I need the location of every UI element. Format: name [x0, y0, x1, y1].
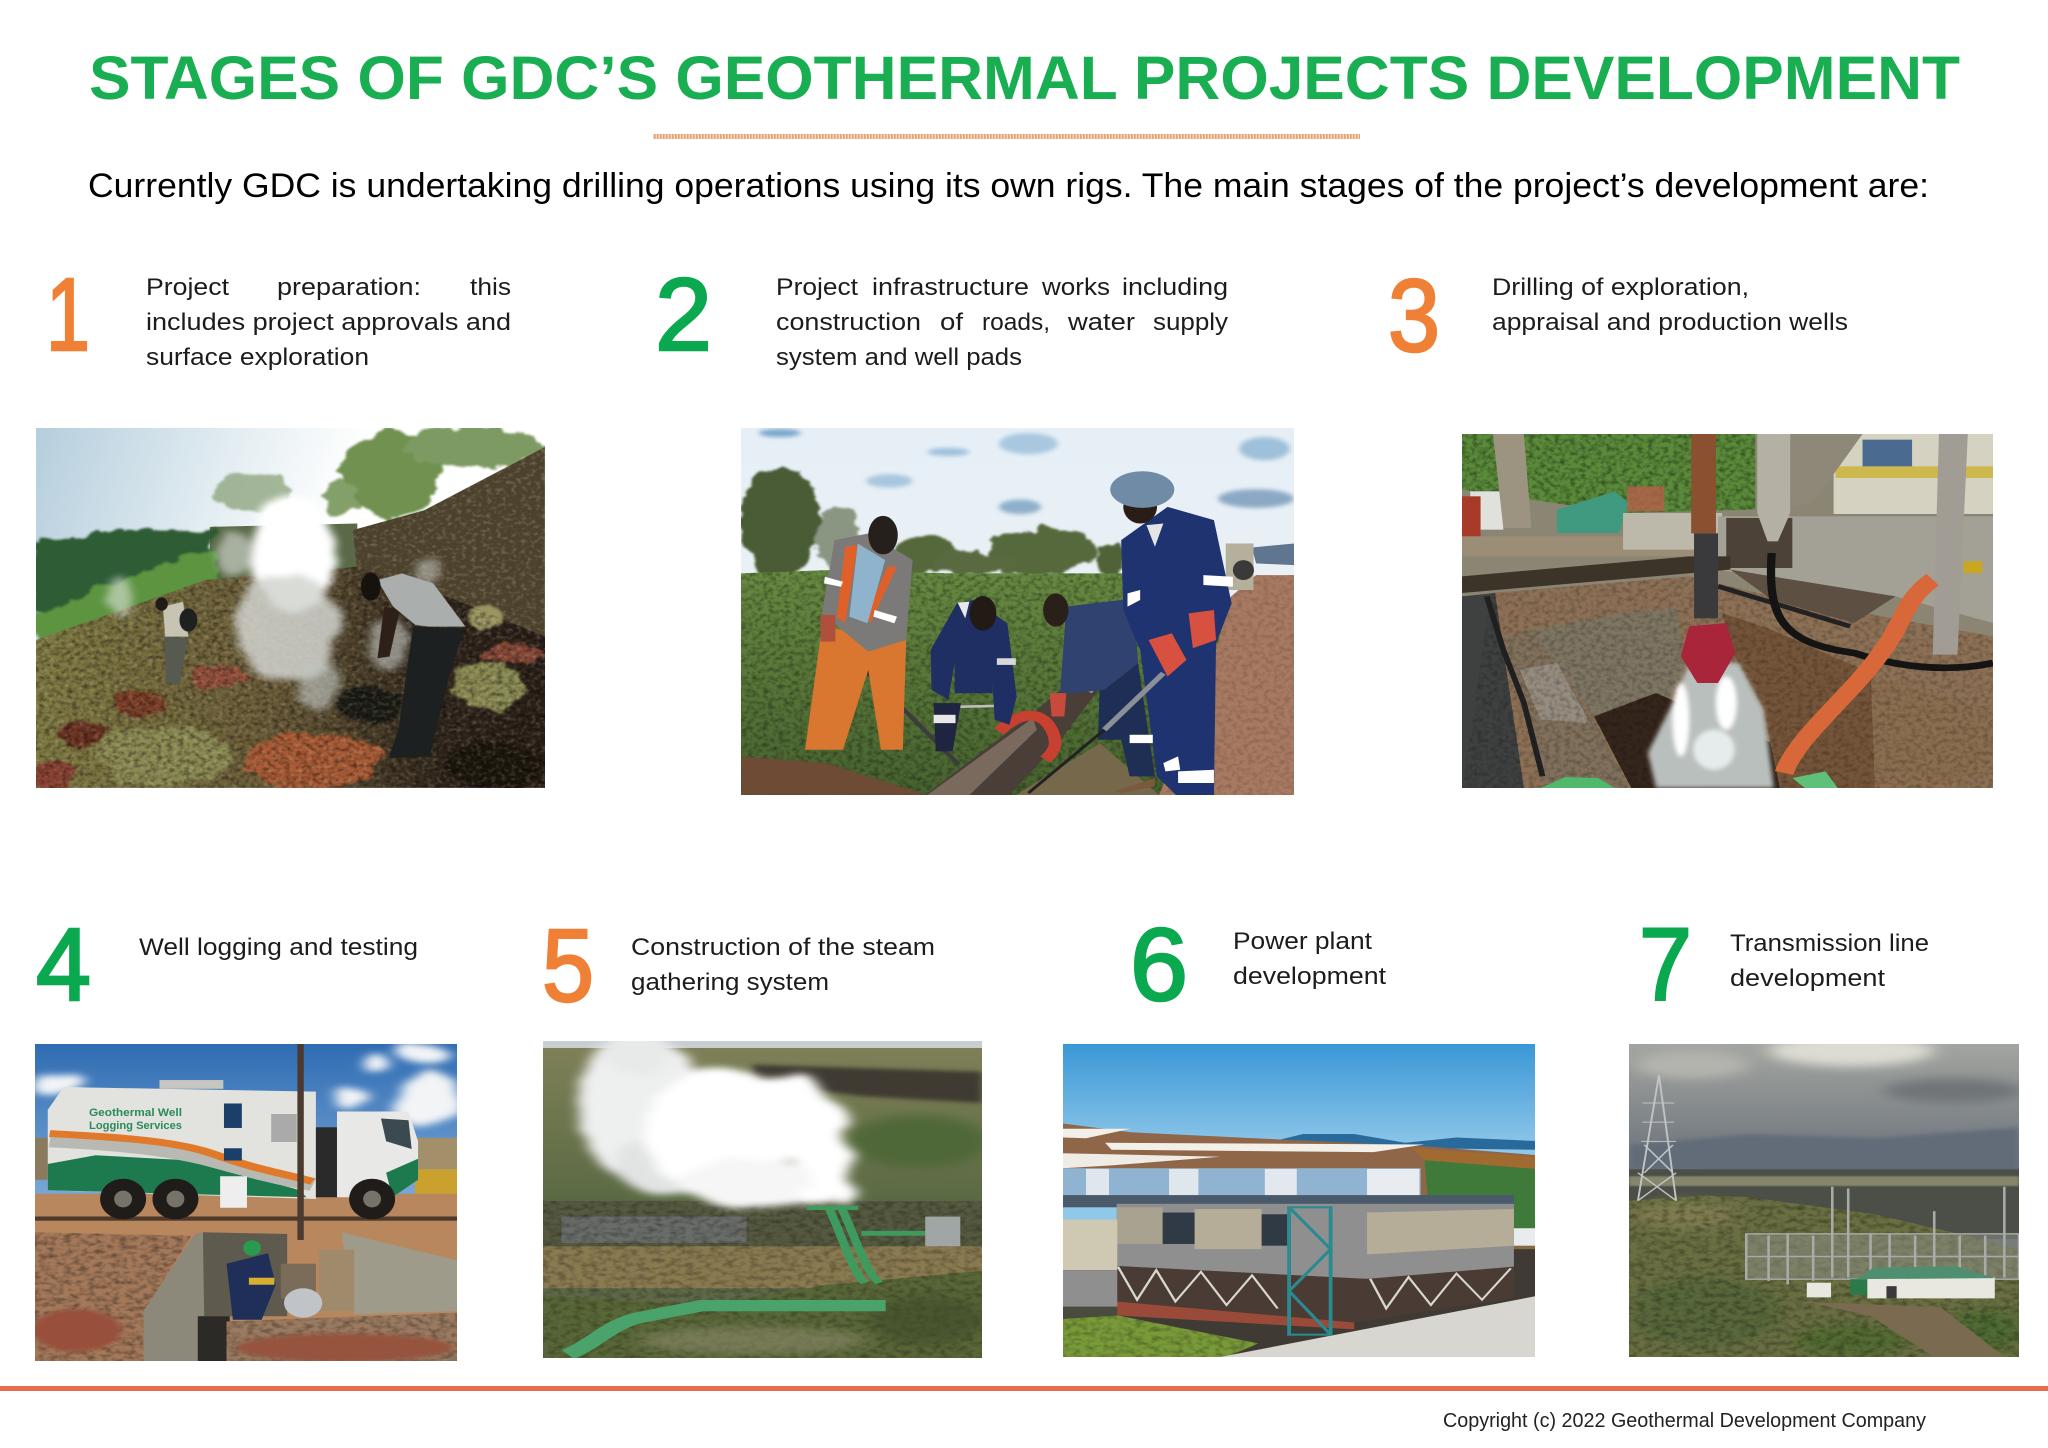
- stage 7 number: 7: [1639, 907, 1692, 1022]
- stage 6 description: development: [1233, 963, 1386, 990]
- stage 2 description: construction: [776, 309, 921, 336]
- stage 5 description: Construction of the steam: [631, 934, 935, 961]
- stage 4 description: Well logging and testing: [139, 934, 418, 961]
- truck lettering: [89, 1107, 182, 1132]
- stage 7 description: [1730, 930, 1929, 992]
- title: STAGES OF GDC’S GEOTHERMAL PROJECTS DEVELOPMENT: [89, 44, 1960, 112]
- stage 6 description: [1233, 928, 1386, 990]
- truck lettering: Geothermal Well: [89, 1107, 182, 1119]
- stage 2 description: including: [1122, 274, 1228, 301]
- photo 6: power plant cooling towers: [1063, 1044, 1535, 1357]
- stage 1 description: preparation:: [277, 274, 421, 301]
- stage 1 description: Project: [146, 274, 229, 301]
- stage 2 description: roads,: [982, 309, 1050, 336]
- stage 3 description: appraisal and production wells: [1492, 309, 1848, 336]
- stage 5 description: [631, 934, 935, 996]
- stage 2 description: works: [1041, 274, 1110, 301]
- stage 1 description: this: [470, 274, 511, 301]
- stage 5 description: gathering system: [631, 969, 829, 996]
- stage 1 description: includes project approvals and: [146, 309, 511, 336]
- stage 3 description: [1492, 274, 1848, 336]
- photo 7: substation and transmission tower: [1629, 1044, 2019, 1357]
- stage 2 description: system and well pads: [776, 344, 1022, 371]
- stage 2 description: infrastructure: [872, 274, 1029, 301]
- stage 2 number: 2: [655, 257, 712, 372]
- stage 3 number: 3: [1388, 258, 1440, 373]
- footer rule: [0, 1386, 2048, 1391]
- stage 5 number: 5: [542, 908, 594, 1023]
- stage 3 description: Drilling of exploration,: [1492, 274, 1749, 301]
- truck lettering: Logging Services: [89, 1120, 182, 1132]
- stage 4 number: 4: [36, 907, 91, 1022]
- stage 2 description: [776, 274, 1228, 371]
- stage 7 description: development: [1730, 965, 1885, 992]
- stage 1 number: 1: [46, 257, 90, 372]
- photo 3: drill bit spraying water into cellar: [1462, 434, 1993, 788]
- photo 5: steam venting from green pipelines: [543, 1041, 982, 1358]
- stage 2 description: supply: [1153, 309, 1228, 336]
- photo 4: well logging truck and cellar: [32, 1044, 460, 1362]
- title divider: [653, 134, 1360, 139]
- photo 1: geologists at steaming vent: [36, 428, 545, 788]
- stage 1 description: [146, 274, 511, 371]
- photo 2: crew repairing pipeline: [741, 428, 1294, 795]
- stage 2 description: water: [1067, 309, 1135, 336]
- stage 2 description: Project: [776, 274, 858, 301]
- stage 2 description: of: [940, 309, 963, 336]
- subtitle: Currently GDC is undertaking drilling operations using its own rigs. The main stages of the project’s development are:: [88, 167, 1929, 205]
- stage 7 description: Transmission line: [1730, 930, 1929, 957]
- stage 6 number: 6: [1130, 907, 1188, 1022]
- stage 1 description: surface exploration: [146, 344, 369, 371]
- stage 6 description: Power plant: [1233, 928, 1372, 955]
- copyright: Copyright (c) 2022 Geothermal Development Company: [1443, 1410, 1926, 1432]
